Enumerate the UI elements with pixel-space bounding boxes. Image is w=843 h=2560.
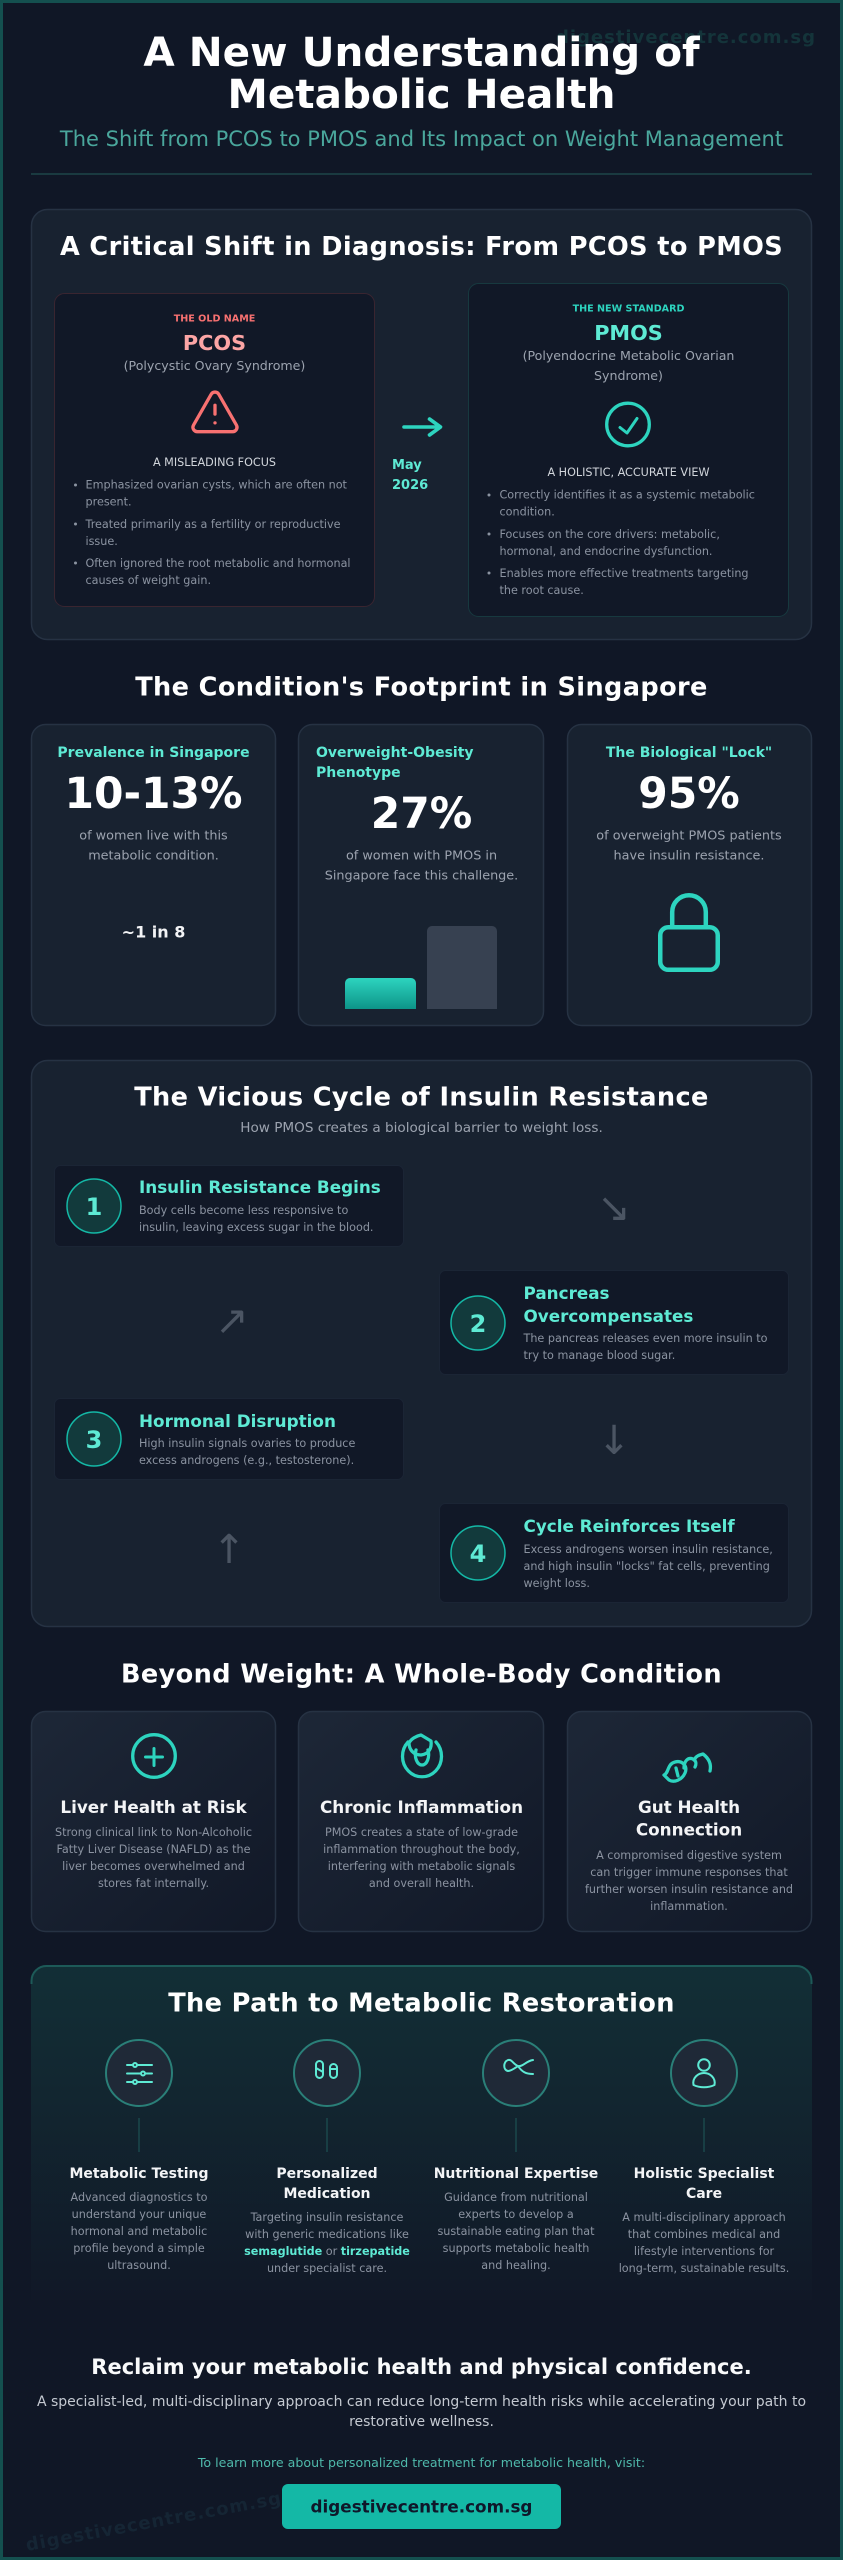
step title: Hormonal Disruption: [139, 1411, 336, 1431]
icon: check circle: [607, 403, 649, 446]
stat description: Singapore face this challenge.: [325, 868, 518, 884]
visit prompt: To learn more about personalized treatment for metabolic health, visit:: [197, 2455, 645, 2470]
card: gut health: [568, 1712, 812, 1932]
subheading: a holistic accurate view: A HOLISTIC, ACCURATE VIEW: [547, 466, 710, 479]
icon: plus circle: [133, 1735, 175, 1777]
card description: Fatty Liver Disease (NAFLD) as the: [57, 1843, 251, 1856]
pillar description: Targeting insulin resistance: [250, 2211, 404, 2224]
pillar description: understand your unique: [72, 2208, 206, 2221]
card title: Gut Health: [638, 1797, 740, 1817]
pillar description: sustainable eating plan that: [437, 2225, 595, 2238]
stat description: of women with PMOS in: [346, 848, 497, 864]
callout: 1 in 8: ~1 in 8: [122, 922, 185, 942]
watermark: top right: digestivecentre.com.sg: [556, 27, 816, 48]
button: website: [282, 2484, 561, 2529]
name: PCOS: PCOS: [183, 331, 246, 355]
card: liver health: [32, 1712, 276, 1932]
pillar description: supports metabolic health: [443, 2242, 589, 2255]
date label: May 2026: 2026: [392, 478, 428, 493]
card description: interfering with metabolic signals: [328, 1860, 515, 1873]
date label: May 2026: May: [392, 458, 422, 473]
step number 2: 2: [470, 1310, 486, 1338]
step description: insulin, leaving excess sugar in the blood.: [139, 1221, 373, 1234]
card: chronic inflammation: [298, 1712, 544, 1932]
heading: beyond weight: Beyond Weight: A Whole-Body Condition: [121, 1660, 722, 1690]
icon: pills: [294, 2040, 360, 2106]
card description: inflammation throughout the body,: [323, 1843, 520, 1856]
step 3: [54, 1398, 404, 1480]
subtitle: The Shift from PCOS to PMOS and Its Impact on Weight Management: [59, 127, 783, 151]
pillar title: Holistic Specialist: [634, 2166, 775, 2182]
list: PCOS focus points: causes of weight gain.: [86, 574, 211, 587]
card: PCOS old name: [54, 294, 374, 606]
call to action paragraph: A specialist-led, multi-disciplinary approach can reduce long-term health risks while accelerating your path to: [37, 2394, 806, 2410]
title: Metabolic Health: [228, 70, 615, 118]
list: PMOS view points: Enables more effective treatments targeting: [500, 567, 749, 580]
list: PMOS view points: condition.: [500, 506, 555, 519]
heading: footprint in Singapore: The Condition's Footprint in Singapore: [135, 672, 708, 702]
list: PCOS focus points: issue.: [86, 535, 118, 548]
panel: critical shift in diagnosis: [32, 210, 812, 640]
pillar title: Nutritional Expertise: [434, 2166, 598, 2182]
step title: Insulin Resistance Begins: [139, 1177, 381, 1197]
panel: vicious cycle of insulin resistance: [32, 1060, 812, 1626]
pillar description: Advanced diagnostics to: [70, 2191, 208, 2204]
pillar: metabolic testing: [70, 2040, 208, 2272]
stat label: The Biological "Lock": [606, 745, 772, 761]
pillar description: semaglutide or tirzepatide: [244, 2245, 410, 2258]
list: PMOS view points: [488, 489, 755, 597]
pillar description: experts to develop a: [458, 2208, 574, 2221]
list: PCOS focus points: [74, 479, 351, 587]
list: PMOS view points: Focuses on the core drivers: metabolic,: [500, 528, 720, 541]
arrow: step 4 to 1: ↗: [215, 1298, 249, 1344]
card description: further worsen insulin resistance and: [585, 1883, 793, 1896]
step 2: [440, 1270, 788, 1374]
list: PCOS focus points: Often ignored the root metabolic and hormonal: [86, 557, 351, 570]
step number 4: 4: [470, 1540, 486, 1568]
icon: gut: [664, 1754, 710, 1781]
step title: Overcompensates: [524, 1306, 693, 1326]
card description: can trigger immune responses that: [590, 1866, 788, 1879]
list: PMOS view points: Correctly identifies it as a systemic metabolic: [500, 489, 755, 502]
full name: polyendocrine metabolic ovarian syndrome: Syndrome): [594, 368, 663, 383]
card description: Strong clinical link to Non-Alcoholic: [55, 1826, 252, 1839]
pillar title: Care: [686, 2186, 722, 2202]
subheading: a misleading focus: A MISLEADING FOCUS: [153, 456, 276, 469]
stat description: metabolic condition.: [88, 848, 219, 864]
pillar title: Medication: [283, 2186, 371, 2202]
arrow: step 2 to 3: ↓: [597, 1418, 631, 1464]
pillar description: and healing.: [481, 2259, 551, 2272]
panel: path to metabolic restoration: [31, 1965, 812, 2300]
step description: The pancreas releases even more insulin to: [522, 1332, 768, 1345]
arrow: step 1 to 2: ↘: [597, 1185, 631, 1231]
card description: and overall health.: [369, 1877, 474, 1890]
button: website: digestivecentre.com.sg: [311, 2496, 532, 2516]
full name: polycystic ovary syndrome: (Polycystic Ovary Syndrome): [124, 358, 305, 373]
pillar: holistic specialist care: [619, 2040, 789, 2275]
pillar description: long-term, sustainable results.: [619, 2262, 789, 2275]
pillar description: hormonal and metabolic: [71, 2225, 207, 2238]
pillar description: profile beyond a simple: [73, 2242, 205, 2255]
stat card: biological lock: [568, 724, 812, 1026]
card title: Connection: [636, 1820, 742, 1840]
step title: Pancreas: [524, 1283, 610, 1303]
list: PMOS view points: the root cause.: [500, 584, 584, 597]
name: PMOS: PMOS: [594, 321, 663, 345]
step number 1: [67, 1179, 121, 1233]
stat description: of women live with this: [79, 828, 228, 844]
step 1: [54, 1166, 404, 1246]
list: PCOS focus points: Emphasized ovarian cysts, which are often not: [86, 479, 348, 492]
pillar title: Metabolic Testing: [70, 2166, 208, 2182]
icon: sliders: [106, 2040, 172, 2106]
card description: A compromised digestive system: [596, 1849, 782, 1862]
full name: polyendocrine metabolic ovarian syndrome: (Polyendocrine Metabolic Ovarian: [523, 348, 734, 363]
pillar description: lifestyle interventions for: [634, 2245, 775, 2258]
step description: and high insulin "locks" fat cells, preventing: [524, 1560, 770, 1573]
stat label: Overweight-Obesity: [316, 745, 474, 761]
stat description: of overweight PMOS patients: [596, 828, 782, 844]
card description: PMOS creates a state of low-grade: [325, 1826, 518, 1839]
stat number: 95%: 95%: [638, 769, 740, 818]
label: the new standard: THE NEW STANDARD: [573, 304, 684, 314]
icon: person: [671, 2040, 737, 2106]
stat card: prevalence: [32, 724, 276, 1026]
title: A New Understanding of: [143, 28, 700, 76]
list: PCOS focus points: Treated primarily as a fertility or reproductive: [84, 518, 341, 531]
label: the old name: THE OLD NAME: [174, 314, 255, 324]
card title: Chronic Inflammation: [320, 1797, 523, 1817]
pillar description: that combines medical and: [628, 2228, 780, 2241]
step description: try to manage blood sugar.: [524, 1349, 675, 1362]
icon: inflammation swirl: [403, 1735, 441, 1777]
call to action paragraph: restorative wellness.: [349, 2414, 494, 2430]
card: PMOS new standard: [468, 284, 788, 616]
list: PMOS view points: hormonal, and endocrine dysfunction.: [500, 545, 712, 558]
step number 2: [451, 1296, 505, 1350]
bar chart: [345, 926, 497, 1009]
stat card: overweight-obesity phenotype: [298, 724, 544, 1026]
step 4: [440, 1504, 788, 1602]
icon: wave: [483, 2040, 549, 2106]
stat label: Prevalence in Singapore: [57, 745, 250, 761]
arrow: step 3 to 4: ↑: [212, 1527, 246, 1573]
card description: stores fat internally.: [98, 1877, 209, 1890]
pillar description: A multi-disciplinary approach: [622, 2211, 786, 2224]
step number 3: 3: [86, 1426, 102, 1454]
icon: padlock: [660, 895, 718, 970]
icon: warning triangle: [193, 392, 237, 432]
card title: Liver Health at Risk: [60, 1797, 247, 1817]
step description: excess androgens (e.g., testosterone).: [139, 1454, 354, 1467]
step number 4: [451, 1526, 505, 1580]
heading: vicious cycle: The Vicious Cycle of Insulin Resistance: [134, 1082, 709, 1112]
step number 3: [67, 1412, 121, 1466]
call to action heading: Reclaim your metabolic health and physical confidence.: [91, 2355, 752, 2379]
step number 1: 1: [86, 1193, 102, 1221]
watermark: bottom left: digestivecentre.com.sg: [24, 2488, 284, 2556]
heading: critical shift: A Critical Shift in Diagnosis: From PCOS to PMOS: [60, 232, 783, 262]
pillar description: ultrasound.: [107, 2259, 171, 2272]
title: [143, 28, 700, 118]
card description: inflammation.: [650, 1900, 728, 1913]
stat number: 27%: 27%: [371, 789, 472, 838]
heading: path to restoration: The Path to Metabolic Restoration: [168, 1988, 675, 2018]
pillar description: under specialist care.: [267, 2262, 387, 2275]
pillar description: Guidance from nutritional: [444, 2191, 588, 2204]
step description: Body cells become less responsive to: [139, 1204, 348, 1217]
pillar: personalized medication: [244, 2040, 410, 2275]
stat description: have insulin resistance.: [614, 848, 764, 864]
pillar description: with generic medications like: [245, 2228, 409, 2241]
step description: Excess androgens worsen insulin resistance,: [524, 1543, 773, 1556]
stat number: 10-13%: 10-13%: [64, 769, 243, 818]
step description: High insulin signals ovaries to produce: [139, 1437, 355, 1450]
card description: liver becomes overwhelmed and: [62, 1860, 245, 1873]
pillar title: Personalized: [276, 2166, 378, 2182]
pillar: nutritional expertise: [434, 2040, 598, 2272]
stat label: Phenotype: [316, 765, 401, 781]
arrow: from PCOS to PMOS: [404, 419, 440, 435]
list: PCOS focus points: present.: [86, 496, 132, 509]
step title: Cycle Reinforces Itself: [524, 1516, 735, 1536]
step description: weight loss.: [524, 1577, 590, 1590]
subheading: biological barrier: How PMOS creates a biological barrier to weight loss.: [240, 1120, 603, 1136]
